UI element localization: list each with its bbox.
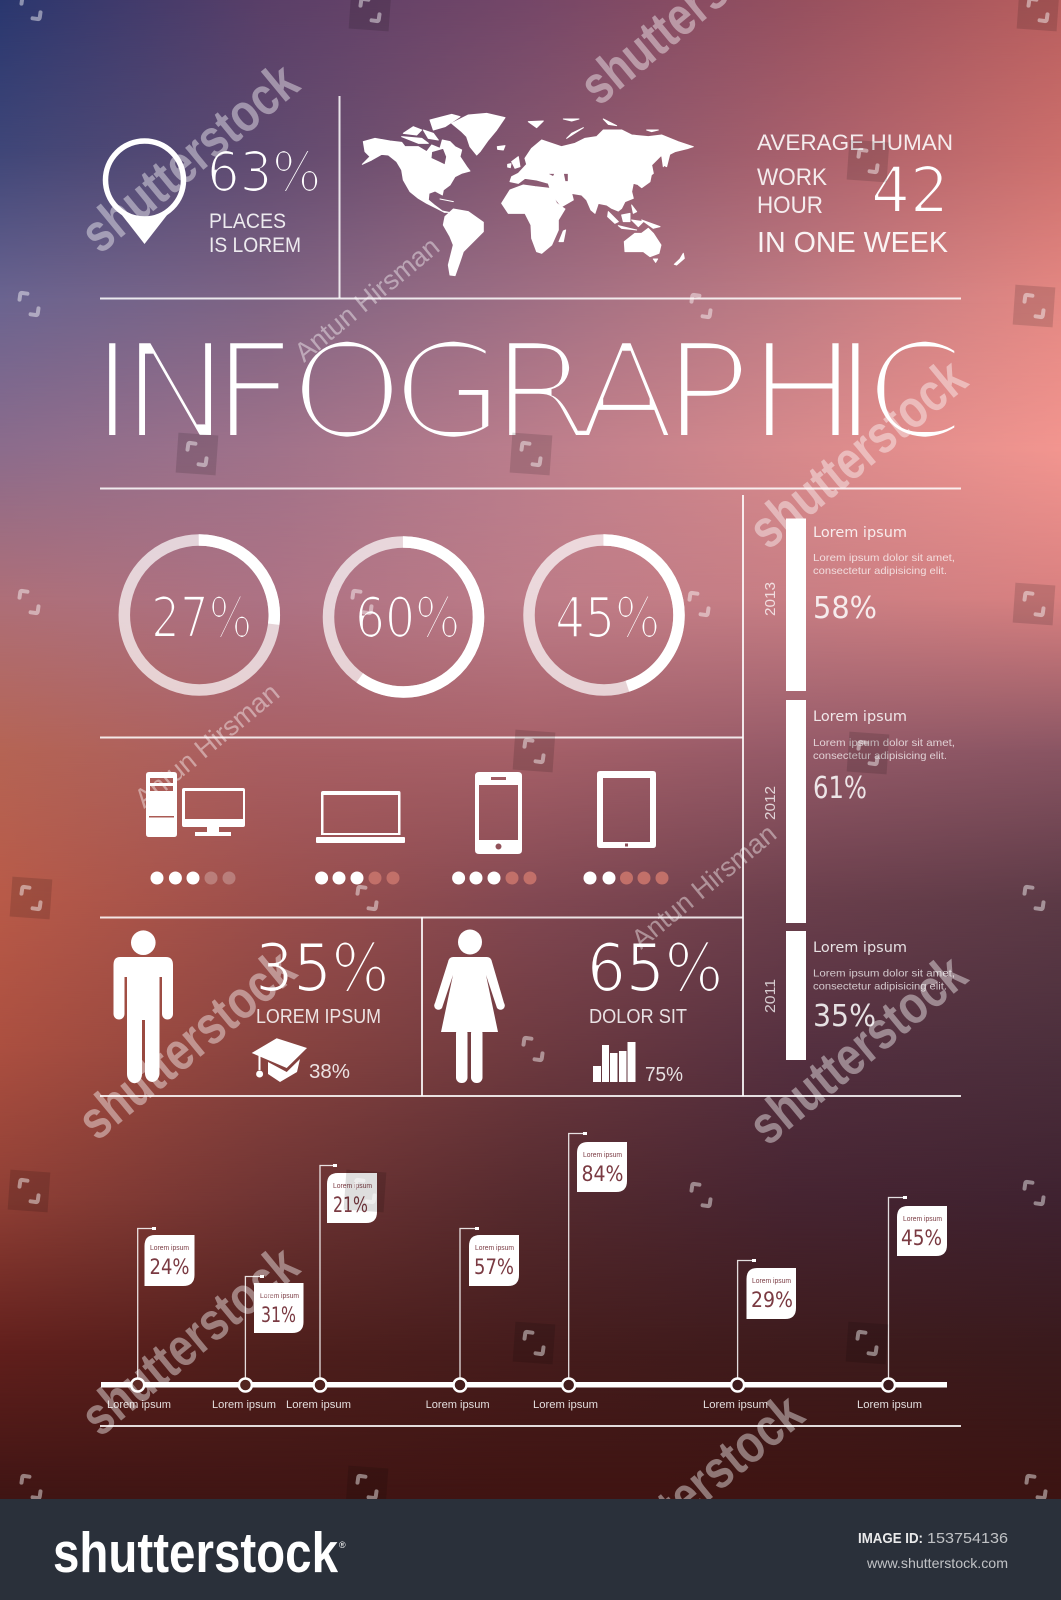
title: INFOGRAPHIC: [91, 314, 966, 470]
percent 63: 63%: [207, 140, 321, 204]
panel: places statistic: [106, 140, 321, 257]
flag 24 percent: Lorem ipsum: [107, 1399, 171, 1411]
entry 2013: [762, 518, 955, 691]
watermarks: shutterstock: [574, 1382, 815, 1595]
icon: map pin: [106, 141, 184, 244]
rating dots: desktop: [150, 872, 236, 884]
label 45 percent: 45%: [555, 586, 660, 651]
flag 57 percent: Lorem ipsum: [475, 1245, 514, 1252]
flag 21 percent: 21%: [333, 1193, 368, 1217]
watermarks: shutterstock: [69, 51, 310, 264]
entry 2012: Lorem ipsum dolor sit amet,: [813, 737, 955, 749]
flag 29 percent: Lorem ipsum: [752, 1278, 791, 1285]
panel: average work hours: 42: [871, 154, 949, 227]
website: www.shutterstock.com: [866, 1555, 1008, 1571]
icon: graduation cap: [252, 1038, 307, 1082]
rating dots: laptop: [315, 872, 400, 884]
watermarks: Antun Hirsman: [289, 231, 445, 368]
panel: devices: [146, 771, 668, 884]
image id: IMAGE ID:: [858, 1530, 923, 1547]
entry 2012: Lorem ipsum: [813, 709, 907, 725]
timeline axis: [101, 1382, 947, 1388]
flag 31 percent: Lorem ipsum: [260, 1293, 299, 1300]
flag 45 percent: Lorem ipsum: [903, 1216, 942, 1223]
panel: male statistic: [114, 929, 389, 1083]
panel: average work hours: HOUR: [757, 192, 823, 219]
entry 2012: 61%: [813, 771, 867, 806]
entry 2011: 35%: [813, 999, 876, 1034]
caption: dolor sit: DOLOR SIT: [589, 1006, 687, 1028]
caption: places is lorem: [209, 210, 301, 257]
stat 38 percent: 38%: [309, 1061, 350, 1083]
entry 2012: 2012: [762, 786, 779, 820]
panel: average work hours: [757, 130, 953, 259]
label 60 percent: 60%: [355, 586, 460, 651]
flag 29 percent: [703, 1259, 796, 1411]
flag 24 percent: [107, 1227, 194, 1411]
ring chart 45 percent: [529, 540, 679, 690]
watermarks: shutterstock: [66, 938, 307, 1151]
flag 84 percent: [533, 1132, 627, 1411]
caption: places is lorem: IS LOREM: [209, 234, 301, 257]
footer logo: ®: [339, 1540, 346, 1550]
icon: bar chart: [593, 1042, 636, 1082]
panel: yearly timeline column: [762, 518, 955, 1060]
icon: tablet: [597, 771, 656, 848]
flag 21 percent: Lorem ipsum: [333, 1183, 372, 1190]
entry 2011: 2011: [762, 979, 779, 1013]
flag 57 percent: 57%: [474, 1255, 514, 1279]
entry 2012: [762, 700, 955, 923]
percent 35: 35%: [255, 929, 389, 1007]
watermarks: Antun Hirsman: [626, 818, 782, 955]
flag 21 percent: Lorem ipsum: [286, 1399, 351, 1411]
panel: ring charts: [124, 540, 679, 692]
panel: average work hours: IN ONE WEEK: [757, 227, 949, 259]
entry 2011: consectetur adipisicing elit.: [813, 980, 947, 992]
flag 57 percent: Lorem ipsum: [426, 1399, 490, 1411]
entry 2013: Lorem ipsum: [813, 525, 907, 541]
flag 31 percent: Lorem ipsum: [212, 1399, 276, 1411]
watermarks: shutterstock: [737, 347, 978, 560]
entry 2011: Lorem ipsum dolor sit amet,: [813, 968, 955, 980]
flag 45 percent: [857, 1196, 947, 1411]
icon: desktop computer: [146, 772, 245, 837]
ring chart 60 percent: [328, 542, 478, 692]
entry 2013: 58%: [813, 591, 877, 626]
icon: man: [114, 930, 173, 1083]
flag 84 percent: Lorem ipsum: [583, 1152, 622, 1159]
watermarks: shutterstock: [69, 1234, 310, 1447]
flag 24 percent: 24%: [150, 1255, 190, 1279]
flag 84 percent: Lorem ipsum: [533, 1399, 598, 1411]
panel: female statistic: [434, 929, 723, 1086]
percent 65: 65%: [587, 929, 723, 1007]
footer logo: shutterstock: [53, 1521, 338, 1585]
entry 2013: Lorem ipsum dolor sit amet,: [813, 552, 955, 564]
flag 29 percent: 29%: [751, 1288, 793, 1312]
icon: smartphone: [475, 772, 522, 854]
ring chart 27 percent: [124, 540, 274, 690]
flag 31 percent: 31%: [261, 1303, 296, 1327]
image id: 153754136: [927, 1530, 1008, 1547]
flag 21 percent: [286, 1164, 377, 1411]
flag 57 percent: [426, 1227, 519, 1411]
label 27 percent: 27%: [151, 586, 252, 651]
flag 31 percent: [212, 1275, 304, 1411]
watermarks: Antun Hirsman: [129, 677, 285, 814]
entry 2011: [762, 931, 955, 1060]
flag 45 percent: Lorem ipsum: [857, 1399, 922, 1411]
chart: flag timeline: [101, 1132, 947, 1411]
entry 2013: consectetur adipisicing elit.: [813, 565, 947, 577]
entry 2011: Lorem ipsum: [813, 940, 907, 956]
panel: average work hours: WORK: [757, 164, 827, 191]
rating dots: phone: [452, 872, 536, 884]
rating dots: tablet: [584, 872, 668, 884]
stat 75 percent: 75%: [645, 1064, 683, 1086]
world map: [362, 113, 693, 276]
footer bar: [0, 1499, 1061, 1600]
entry 2013: 2013: [762, 582, 779, 616]
watermarks: shutterstock: [737, 943, 978, 1156]
flag 84 percent: 84%: [582, 1162, 624, 1186]
panel: average work hours: AVERAGE HUMAN: [757, 130, 953, 155]
icon: laptop: [316, 791, 405, 843]
flag 24 percent: Lorem ipsum: [150, 1245, 189, 1252]
caption: lorem ipsum: LOREM IPSUM: [256, 1006, 381, 1028]
image id: [858, 1530, 1008, 1547]
icon: woman: [434, 930, 505, 1083]
flag 29 percent: Lorem ipsum: [703, 1399, 768, 1411]
entry 2012: consectetur adipisicing elit.: [813, 750, 947, 762]
caption: places is lorem: PLACES: [209, 210, 286, 233]
flag 45 percent: 45%: [901, 1226, 942, 1250]
